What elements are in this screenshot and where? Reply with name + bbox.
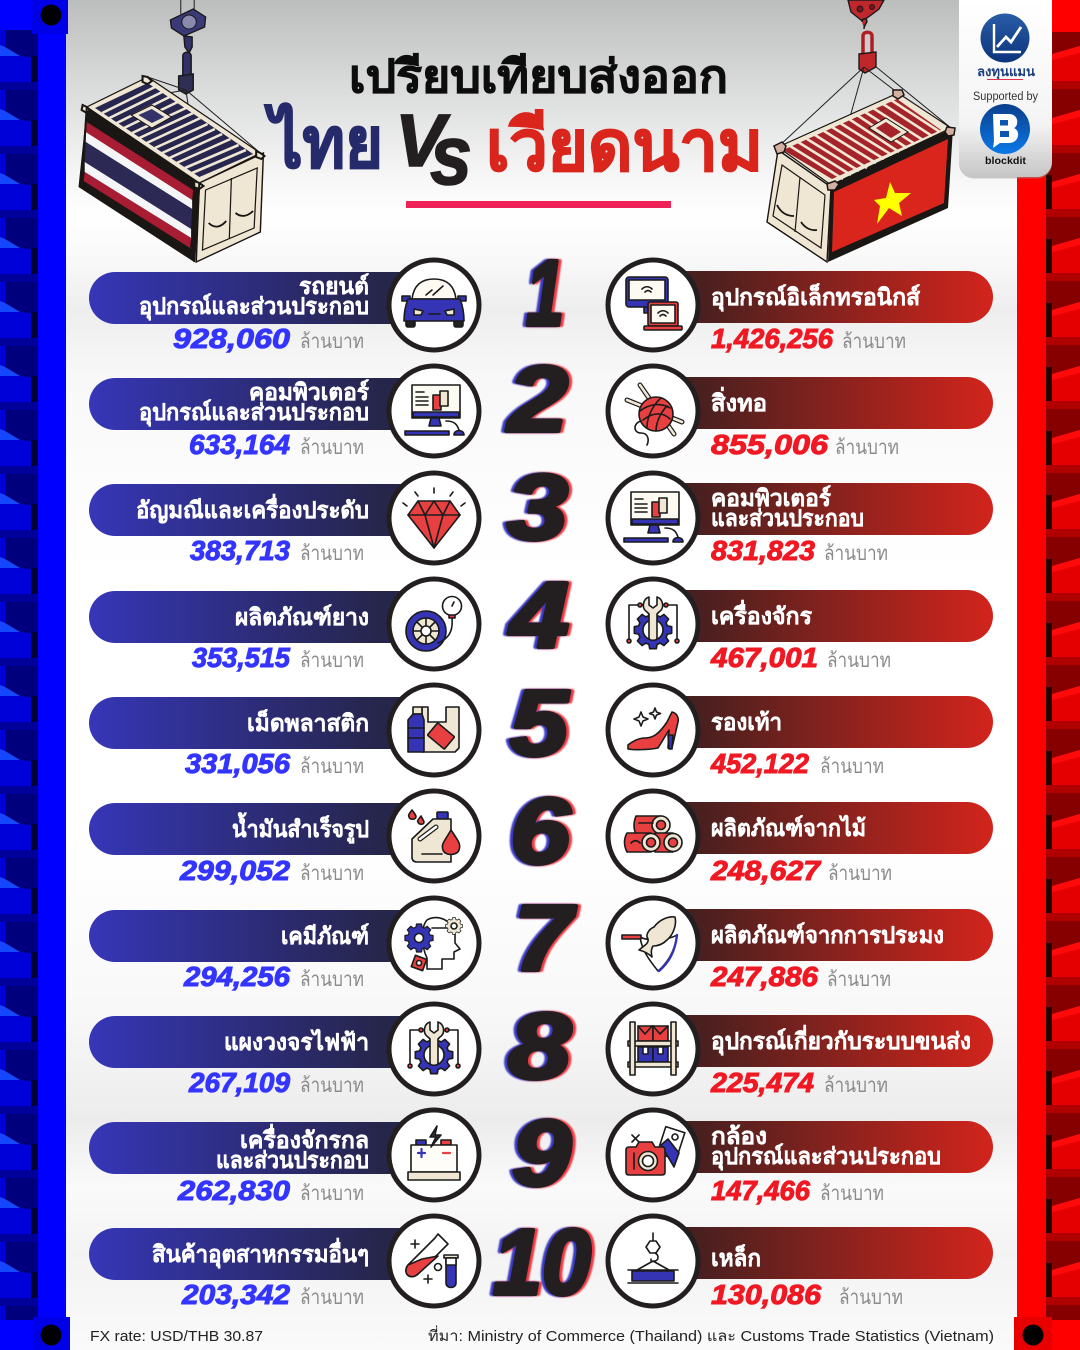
rank 6: 6 bbox=[510, 779, 571, 883]
rank 7: 7 bbox=[514, 886, 577, 990]
Vietnam row 4: ล้านบาท bbox=[827, 650, 891, 672]
Thailand row 6 bbox=[89, 791, 479, 886]
Vietnam row 3: และส่วนประกอบ bbox=[711, 505, 864, 531]
Thailand row 9 bbox=[89, 1110, 479, 1206]
Thailand row 6: ล้านบาท bbox=[300, 863, 364, 885]
icon: computer bbox=[405, 385, 464, 435]
Vietnam row 5 bbox=[608, 685, 993, 779]
Thailand row 7: เคมีภัณฑ์ bbox=[281, 923, 369, 949]
Thailand row 1 bbox=[89, 260, 479, 354]
Thailand row 1: รถยนต์ bbox=[299, 273, 369, 299]
Thailand row 8 bbox=[89, 1004, 479, 1098]
Thailand row 8: ล้านบาท bbox=[300, 1075, 364, 1097]
heading: Vietnam: เวียดนาม bbox=[486, 107, 763, 185]
Thailand row 5: ล้านบาท bbox=[300, 756, 364, 778]
Vietnam row 8 bbox=[608, 1004, 993, 1098]
Vietnam row 7: 247,886 bbox=[710, 961, 818, 992]
rank 1: 1 bbox=[526, 241, 564, 345]
Vietnam row 2: 855,006 bbox=[711, 429, 828, 460]
Thailand row 4: ล้านบาท bbox=[300, 650, 364, 672]
icon: fish in net bbox=[622, 917, 677, 971]
Vietnam row 6: 248,627 bbox=[710, 855, 822, 886]
Vietnam row 1 bbox=[608, 260, 993, 354]
Thailand row 10: สินค้าอุตสาหกรรมอื่นๆ bbox=[152, 1237, 369, 1269]
Vietnam row 5: รองเท้า bbox=[711, 709, 782, 735]
icon: gear and wrench bbox=[408, 1022, 460, 1074]
Vietnam row 7: ล้านบาท bbox=[827, 969, 891, 991]
Vietnam row 2: สิ่งทอ bbox=[711, 386, 767, 416]
Thailand row 1: 928,060 bbox=[173, 323, 290, 354]
right red container frame bbox=[1014, 0, 1080, 1350]
Thailand row 4: 353,515 bbox=[192, 642, 290, 673]
Vietnam row 6 bbox=[608, 791, 993, 886]
Thailand row 9: 262,830 bbox=[177, 1175, 290, 1206]
icon: test tubes bbox=[406, 1234, 458, 1288]
Vietnam row 6: ล้านบาท bbox=[828, 863, 892, 885]
Thailand row 4: ผลิตภัณฑ์ยาง bbox=[235, 604, 369, 630]
rank 2: 2 bbox=[506, 347, 568, 451]
Vietnam row 9: อุปกรณ์และส่วนประกอบ bbox=[711, 1143, 941, 1171]
Thailand row 7: 294,256 bbox=[183, 961, 290, 992]
Thailand row 8: 267,109 bbox=[188, 1067, 290, 1098]
Thailand row 10: ล้านบาท bbox=[300, 1287, 364, 1309]
Thailand row 9: ล้านบาท bbox=[300, 1183, 364, 1205]
Thailand row 9: เครื่องจักรกล bbox=[240, 1123, 369, 1153]
rank 5: 5 bbox=[510, 671, 569, 775]
Vietnam row 5: ล้านบาท bbox=[820, 756, 884, 778]
Thailand row 6: น้ำมันสำเร็จรูป bbox=[232, 812, 369, 844]
icon: camera with photo bbox=[626, 1127, 685, 1175]
Thailand row 2: คอมพิวเตอร์ bbox=[249, 379, 370, 405]
Thailand row 7 bbox=[89, 898, 479, 992]
icon: lngtunman logo bbox=[980, 14, 1030, 62]
icon: car bbox=[402, 279, 466, 327]
icon: plastic bottle and bag bbox=[408, 707, 459, 752]
icon: diamond bbox=[403, 488, 465, 548]
Vietnam row 7: ผลิตภัณฑ์จากการประมง bbox=[711, 922, 944, 948]
Thailand row 8: แผงวงจรไฟฟ้า bbox=[224, 1028, 369, 1055]
icon: rubber tyre with gauge bbox=[406, 596, 462, 651]
Vietnam row 4: เครื่องจักร bbox=[711, 599, 813, 629]
heading: Vs bbox=[395, 99, 472, 202]
Vietnam row 3: 831,823 bbox=[711, 535, 815, 566]
footnote: source: ที่มา: Ministry of Commerce (Thailand) และ Customs Trade Statistics (Vietnam) bbox=[428, 1325, 994, 1345]
Vietnam row 4: 467,001 bbox=[710, 642, 818, 673]
icon: steel beam on crane hook bbox=[628, 1233, 678, 1283]
icon: computer bbox=[624, 492, 683, 542]
Thailand row 4 bbox=[89, 579, 479, 673]
Vietnam row 9 bbox=[608, 1110, 993, 1206]
Thailand row 2 bbox=[89, 366, 479, 460]
icon: connected devices bbox=[626, 277, 682, 330]
rank 3: 3 bbox=[507, 455, 568, 559]
Vietnam row 2 bbox=[608, 366, 993, 460]
title line: เปรียบเทียบส่งออก bbox=[349, 51, 728, 102]
heading: Vs: s bbox=[430, 108, 472, 202]
Vietnam row 8: 225,474 bbox=[710, 1067, 814, 1098]
left blue container frame bbox=[0, 0, 70, 1350]
logo card bbox=[959, 0, 1052, 178]
Vietnam row 3: คอมพิวเตอร์ bbox=[711, 485, 832, 511]
icon: warehouse shelf bbox=[628, 1022, 678, 1075]
Vietnam row 3 bbox=[608, 473, 993, 566]
Thailand row 1: อุปกรณ์และส่วนประกอบ bbox=[139, 293, 369, 321]
Thailand row 3: อัญมณีและเครื่องประดับ bbox=[136, 493, 369, 524]
Vietnam row 6: ผลิตภัณฑ์จากไม้ bbox=[711, 814, 866, 841]
Thailand row 3: 383,713 bbox=[190, 535, 290, 566]
icon: high heel bbox=[628, 708, 678, 750]
Vietnam row 1: อุปกรณ์อิเล็กทรอนิกส์ bbox=[711, 282, 921, 312]
logo name: blockdit: blockdit bbox=[985, 155, 1026, 167]
Vietnam row 9: กล้อง bbox=[711, 1123, 767, 1149]
Thailand row 2: 633,164 bbox=[189, 429, 290, 460]
icon: battery bbox=[408, 1126, 460, 1180]
Thailand row 5 bbox=[89, 685, 479, 779]
icon: gear and wrench bbox=[627, 597, 679, 649]
title underline bbox=[406, 201, 671, 208]
Thailand row 10 bbox=[89, 1216, 479, 1310]
Vietnam row 4 bbox=[608, 579, 993, 673]
rank 4: 4 bbox=[508, 563, 569, 667]
Thailand row 2: อุปกรณ์และส่วนประกอบ bbox=[139, 399, 369, 427]
rank 10: 10 bbox=[493, 1210, 591, 1314]
Thailand row 5: เม็ดพลาสติก bbox=[247, 708, 369, 736]
Thailand row 10: 203,342 bbox=[181, 1279, 290, 1310]
Vietnam row 1: ล้านบาท bbox=[842, 331, 906, 353]
rank 8: 8 bbox=[508, 994, 571, 1098]
supported by label: Supported by bbox=[973, 91, 1038, 103]
Vietnam row 8: ล้านบาท bbox=[824, 1075, 888, 1097]
icon: oil container bbox=[409, 810, 460, 862]
Vietnam row 7 bbox=[608, 898, 993, 992]
Thailand row 2: ล้านบาท bbox=[300, 437, 364, 459]
Vietnam row 9: 147,466 bbox=[711, 1175, 810, 1206]
illustration: Thai flag container bbox=[79, 0, 264, 262]
Thailand row 6: 299,052 bbox=[179, 855, 290, 886]
Vietnam row 1: 1,426,256 bbox=[711, 323, 833, 354]
Vietnam row 10: 130,086 bbox=[711, 1279, 821, 1310]
Thailand row 3 bbox=[89, 473, 479, 566]
Thailand row 1: ล้านบาท bbox=[300, 331, 364, 353]
Thailand row 7: ล้านบาท bbox=[300, 969, 364, 991]
Vietnam row 3: ล้านบาท bbox=[824, 543, 888, 565]
icon: yarn ball bbox=[627, 385, 682, 445]
Vietnam row 10: ล้านบาท bbox=[839, 1287, 903, 1309]
Vietnam row 5: 452,122 bbox=[710, 748, 809, 779]
Vietnam row 2: ล้านบาท bbox=[835, 437, 899, 459]
rank 9: 9 bbox=[512, 1101, 571, 1205]
Thailand row 9: และส่วนประกอบ bbox=[216, 1147, 369, 1173]
logo name: ลงทุนแมน bbox=[977, 64, 1035, 80]
Vietnam row 8: อุปกรณ์เกี่ยวกับระบบขนส่ง bbox=[711, 1024, 971, 1056]
Vietnam row 10 bbox=[608, 1216, 993, 1310]
Thailand row 5: 331,056 bbox=[185, 748, 290, 779]
heading: Thailand: ไทย bbox=[264, 102, 383, 182]
Thailand row 3: ล้านบาท bbox=[300, 543, 364, 565]
illustration: Vietnam flag container bbox=[767, 0, 955, 262]
icon: blockdit logo bbox=[980, 104, 1030, 154]
footnote: FX rate: FX rate: USD/THB 30.87 bbox=[90, 1328, 263, 1345]
icon: wood logs bbox=[624, 816, 682, 852]
heading: Vs: V bbox=[395, 99, 451, 182]
Vietnam row 9: ล้านบาท bbox=[820, 1183, 884, 1205]
Vietnam row 10: เหล็ก bbox=[711, 1243, 761, 1271]
icon: chemical engineer head bbox=[405, 918, 462, 971]
